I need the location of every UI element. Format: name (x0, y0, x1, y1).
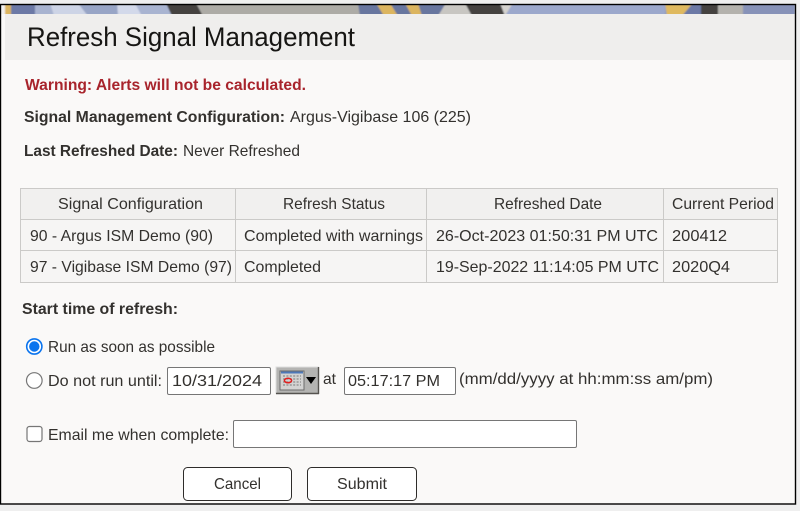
at label: at (323, 371, 337, 388)
time input (344, 368, 456, 394)
submit button (308, 468, 416, 500)
email input (234, 420, 576, 448)
table row: Vigibase: Completed (244, 259, 321, 276)
start time heading: Start time of refresh: (22, 301, 178, 318)
cancel button (184, 468, 292, 500)
table header row: Signal Configuration (58, 196, 203, 213)
email checkbox: Email me when complete: (48, 427, 229, 444)
table header row (58, 196, 774, 213)
warning message: Warning: Alerts will not be calculated. (25, 77, 306, 94)
icon: calendar dropdown (276, 367, 319, 394)
table row: Argus: Completed with warnings (244, 228, 423, 245)
table row: Vigibase: 2020Q4 (672, 259, 730, 276)
signal management configuration: Signal Management Configuration: (24, 109, 285, 126)
table row: Argus: 26-Oct-2023 01:50:31 PM UTC (436, 228, 658, 245)
decorative header banner (2, 5, 795, 14)
table row: Argus: 90 - Argus ISM Demo (90) (30, 228, 213, 245)
cancel button: Cancel (214, 476, 261, 493)
table row: Vigibase (30, 259, 730, 276)
last refreshed date (24, 143, 300, 160)
signal management configuration: Argus-Vigibase 106 (225) (290, 109, 471, 126)
radio option: do not run until: Do not run until: (48, 373, 162, 390)
title: Refresh Signal Management (27, 22, 355, 52)
last refreshed date: Never Refreshed (183, 143, 300, 160)
radio option: run as soon as possible: Run as soon as possible (48, 339, 215, 356)
table row: Vigibase: 97 - Vigibase ISM Demo (97) (30, 259, 232, 276)
last refreshed date: Last Refreshed Date: (24, 143, 178, 160)
table row: Argus (30, 228, 727, 245)
signal management configuration (24, 109, 471, 126)
table row: Vigibase: 19-Sep-2022 11:14:05 PM UTC (436, 259, 659, 276)
time input: 05:17:17 PM (348, 373, 440, 390)
table header row: Current Period (672, 196, 774, 213)
status table (20, 188, 778, 282)
date input: 10/31/2024 (172, 373, 262, 390)
table row: Argus: 200412 (672, 228, 727, 245)
header bar (5, 14, 795, 60)
submit button: Submit (337, 476, 388, 493)
table header row: Refreshed Date (494, 196, 602, 213)
date input (168, 368, 270, 394)
table header row: Refresh Status (283, 196, 385, 213)
date format hint: (mm/dd/yyyy at hh:mm:ss am/pm) (459, 371, 713, 388)
